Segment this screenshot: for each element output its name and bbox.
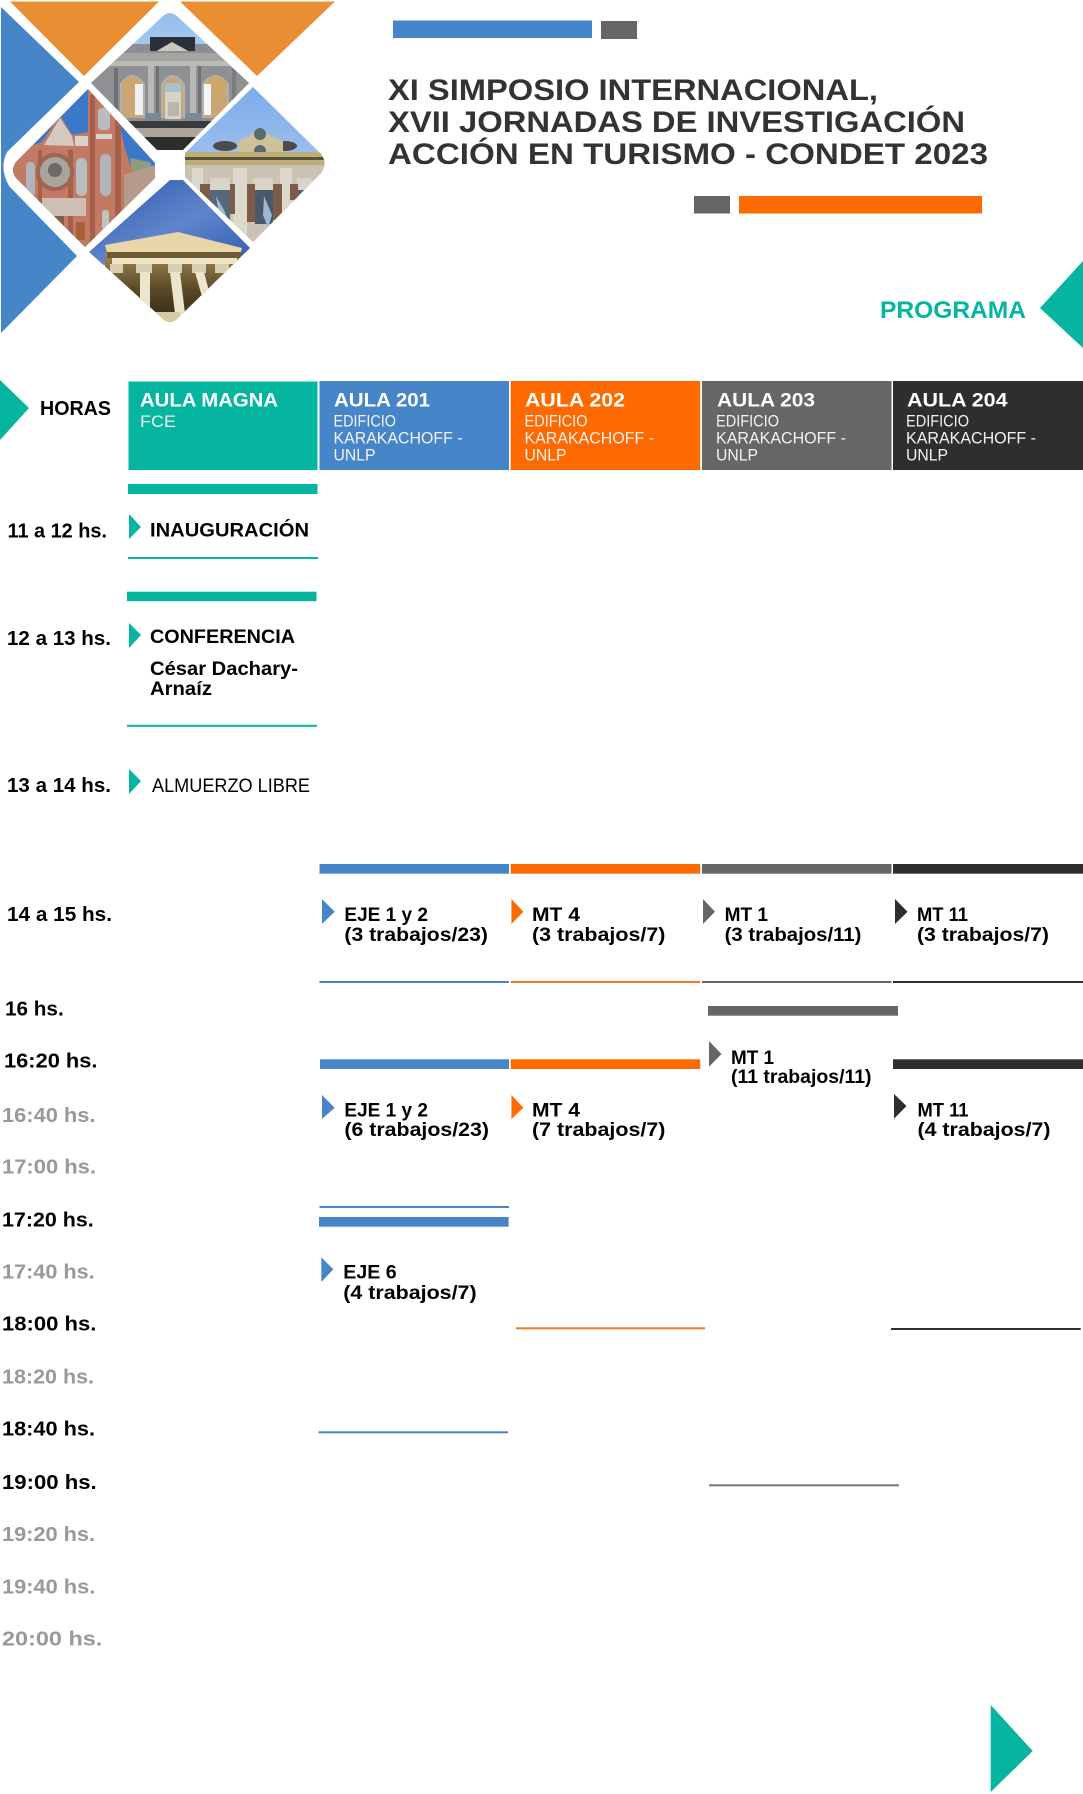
- column header: aula 201: KARAKACHOFF -: [334, 428, 462, 448]
- session: aula 201 eje 1 y 2 first block: EJE 1 y 2: [344, 905, 428, 926]
- session: aula 201 eje 6: EJE 6: [343, 1263, 397, 1284]
- session: almuerzo libre: ALMUERZO LIBRE: [152, 776, 310, 797]
- photo: arcade building: [91, 13, 249, 150]
- icon: teal arrow horas: [0, 380, 29, 440]
- column header: aula 201: EDIFICIO: [334, 412, 396, 431]
- session: aula 203 mt 1 second block: [708, 1006, 899, 1486]
- column header: aula 203: AULA 203: [717, 391, 815, 412]
- column header: aula 203: UNLP: [716, 446, 758, 465]
- session: conferencia: CONFERENCIA: [150, 627, 295, 648]
- time labels column: 18:00 hs.: [2, 1314, 96, 1336]
- title: XVII JORNADAS DE INVESTIGACIÓN: [388, 105, 965, 139]
- time labels column: 18:40 hs.: [2, 1419, 95, 1441]
- icon: teal triangle top right: [1040, 261, 1083, 348]
- photo: museum portico: [89, 180, 250, 322]
- session: aula 204 mt 11 first block: [893, 864, 1083, 983]
- time labels column: 19:40 hs.: [2, 1576, 95, 1598]
- time labels column: 18:20 hs.: [2, 1367, 94, 1389]
- time labels column: 11 a 12 hs.: [8, 521, 107, 543]
- title: ACCIÓN EN TURISMO - CONDET 2023: [388, 137, 988, 171]
- session: aula 201 eje 6: (4 trabajos/7): [343, 1283, 477, 1304]
- session: aula 202 mt 4 first block: [511, 864, 700, 983]
- session: aula 203 mt 1 second block: MT 1: [731, 1048, 774, 1069]
- session: inauguracion: INAUGURACIÓN: [150, 520, 309, 542]
- time labels column: 12 a 13 hs.: [7, 628, 111, 650]
- bar: orange title accent: [739, 196, 982, 214]
- photo: cathedral: [13, 89, 155, 247]
- session: aula 203 mt 1 first block: [702, 864, 892, 983]
- session: aula 201 eje 1 y 2 first block: [320, 864, 509, 983]
- time labels column: 20:00 hs.: [2, 1629, 102, 1651]
- time labels column: 19:20 hs.: [2, 1524, 95, 1546]
- time labels column: 14 a 15 hs.: [7, 904, 112, 926]
- column header: aula magna: [128, 382, 318, 470]
- session: aula 202 mt 4 second block: [511, 1059, 705, 1329]
- session: aula 203 mt 1 first block: MT 1: [725, 905, 768, 926]
- header collage: [1, 2, 335, 333]
- time labels column: 16:20 hs.: [4, 1051, 98, 1073]
- session: conferencia: Arnaíz: [150, 679, 212, 700]
- time labels column: 16:40 hs.: [2, 1105, 96, 1127]
- session: aula 201 eje 1 y 2 first block: (3 trabajos/23): [344, 925, 488, 946]
- column header: aula 204: KARAKACHOFF -: [906, 428, 1036, 448]
- column header: aula 201: [320, 381, 509, 470]
- session: conferencia: [127, 592, 317, 727]
- bar: grey title accent: [694, 196, 730, 214]
- session: conferencia: César Dachary-: [150, 659, 298, 680]
- time labels column: 17:40 hs.: [2, 1262, 95, 1284]
- column header: aula 201: UNLP: [334, 446, 376, 465]
- session: aula 202 mt 4 first block: (3 trabajos/7): [532, 925, 665, 946]
- column header: aula 203: EDIFICIO: [716, 412, 779, 431]
- session: aula 204 mt 11 first block: MT 11: [917, 905, 968, 926]
- column header: aula 202: UNLP: [524, 446, 566, 465]
- column header: aula 204: UNLP: [906, 446, 948, 465]
- time labels column: 17:00 hs.: [2, 1156, 96, 1178]
- session: aula 204 mt 11 first block: (3 trabajos/7): [917, 925, 1049, 946]
- session: aula 201 eje 1 y 2 second block: (6 trabajos/23): [344, 1120, 489, 1141]
- time labels column: 17:20 hs.: [2, 1210, 94, 1232]
- time labels column: 19:00 hs.: [2, 1472, 97, 1494]
- bar: blue header accent: [393, 20, 592, 38]
- horas heading: HORAS: [40, 398, 111, 420]
- session: aula 204 mt 11 second block: [891, 1059, 1083, 1330]
- column header: aula 203: KARAKACHOFF -: [716, 428, 846, 448]
- column header: aula magna: FCE: [140, 412, 176, 431]
- session: aula 201 eje 1 y 2 second block: EJE 1 y 2: [344, 1101, 428, 1122]
- column header: aula magna: AULA MAGNA: [140, 391, 278, 412]
- time labels column: 13 a 14 hs.: [7, 775, 111, 797]
- column header: aula 201: AULA 201: [334, 391, 430, 412]
- session: almuerzo libre: [129, 769, 310, 797]
- session: aula 204 mt 11 second block: (4 trabajos/7): [918, 1120, 1050, 1141]
- column header: aula 203: [702, 381, 892, 470]
- column header: aula 204: AULA 204: [907, 391, 1008, 412]
- time labels column: [2, 521, 112, 1651]
- session: aula 202 mt 4 second block: MT 4: [532, 1101, 580, 1122]
- time labels column: 16 hs.: [5, 999, 64, 1021]
- orange triangle right: [180, 2, 335, 76]
- column header: aula 204: [893, 381, 1083, 470]
- column header: aula 202: [511, 381, 700, 470]
- programa label: PROGRAMA: [880, 297, 1026, 324]
- session: aula 201 eje 6: [318, 1217, 509, 1433]
- column header: aula 202: KARAKACHOFF -: [524, 428, 654, 448]
- orange triangle left: [10, 2, 159, 76]
- column header: aula 202: EDIFICIO: [524, 412, 588, 431]
- session: aula 202 mt 4 first block: MT 4: [532, 905, 580, 926]
- column header: aula 202: AULA 202: [525, 391, 625, 412]
- session: inauguracion: [128, 484, 318, 559]
- bar: grey header accent: [601, 21, 637, 39]
- session: aula 204 mt 11 second block: MT 11: [918, 1101, 969, 1122]
- icon: teal arrow bottom right: [991, 1705, 1033, 1792]
- title: [388, 74, 988, 171]
- session: aula 201 eje 1 y 2 second block: [320, 1059, 509, 1208]
- session: aula 202 mt 4 second block: (7 trabajos/7): [532, 1120, 665, 1141]
- photo: university building: [180, 85, 330, 245]
- session: aula 203 mt 1 second block: (11 trabajos/11): [731, 1067, 872, 1088]
- blue shape left: [1, 7, 79, 333]
- column header: aula 204: EDIFICIO: [906, 412, 969, 431]
- title: XI SIMPOSIO INTERNACIONAL,: [388, 74, 878, 107]
- session: aula 203 mt 1 first block: (3 trabajos/11): [725, 925, 861, 946]
